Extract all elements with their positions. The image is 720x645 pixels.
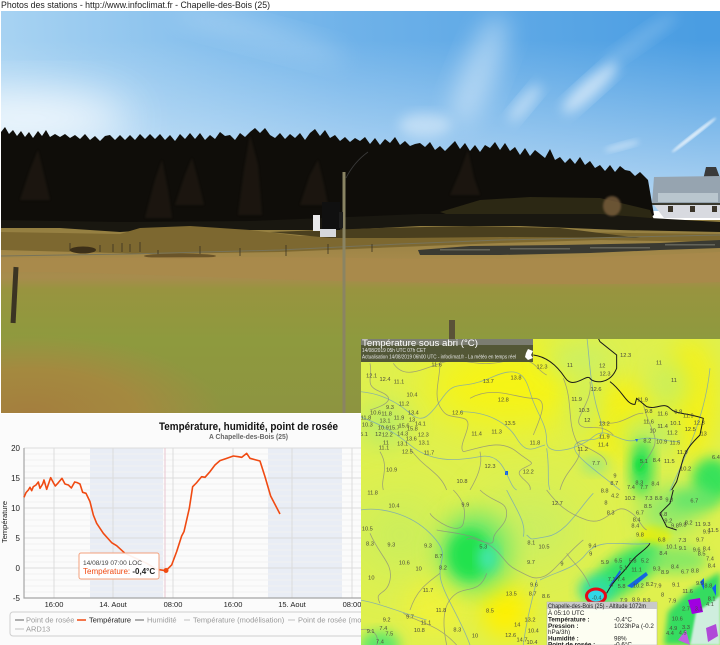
station labels, south: 7.3 <box>678 538 686 544</box>
station labels, north: 13.2 <box>599 422 610 428</box>
station labels, north: 12.3 <box>536 365 547 371</box>
station labels, north: 11 <box>656 361 662 367</box>
station labels, north: 12 <box>584 418 590 424</box>
station labels, north: 8.2 <box>643 439 651 445</box>
station labels, south: 9 <box>589 552 592 558</box>
station labels, south: 9.6 <box>530 582 538 588</box>
station labels, north: 12.5 <box>685 427 696 433</box>
station labels, north: 9 <box>613 473 617 479</box>
station labels, south: 8 <box>661 593 664 599</box>
station popup: 1023hPa (-0.2 <box>614 623 654 630</box>
station labels, south: 6.7 <box>636 510 644 516</box>
alpine cold corner <box>664 572 720 645</box>
station labels, north: 11.6 <box>643 419 654 425</box>
station labels, south: 8 <box>604 500 608 506</box>
station labels, south: 9.7 <box>527 560 535 566</box>
station labels, south: 7.4 <box>617 577 625 583</box>
station labels, south: 8.2 <box>646 582 654 588</box>
station popup: Pression : <box>548 623 578 630</box>
station labels, north: 10.3 <box>578 408 589 414</box>
station labels, south: 8.8 <box>655 496 663 502</box>
station labels, north: 15.8 <box>407 426 418 432</box>
station labels, north: 11 <box>567 363 573 369</box>
station labels, north: 13.1 <box>379 418 391 424</box>
station popup: Température : <box>548 616 590 624</box>
map header: Température sous abri (°C) <box>362 338 478 349</box>
temperature colour fields <box>355 340 720 645</box>
station labels, north: 11.8 <box>361 415 371 421</box>
legend: ARD13 <box>26 624 50 634</box>
legend <box>10 612 396 636</box>
station labels, south: 9.4 <box>588 543 596 549</box>
x axis labels: 16:00 <box>45 600 63 609</box>
station labels, south: 12.6 <box>505 633 516 639</box>
station labels, north: 11.2 <box>399 402 409 408</box>
station labels, south: 8.9 <box>632 597 640 603</box>
station labels, north: 9.8 <box>645 409 653 415</box>
station labels, north: 10.9 <box>656 440 667 446</box>
station labels, south: 5.9 <box>601 560 609 566</box>
station labels, south: 10.8 <box>414 628 425 634</box>
station labels, south: 11.8 <box>436 608 446 614</box>
station labels, south: 9.1 <box>367 629 375 635</box>
station labels, south: 10 <box>472 634 478 640</box>
station labels, south: 7.9 <box>654 584 662 590</box>
station labels, north: 12.2 <box>523 470 534 476</box>
station labels, south: 11.7 <box>423 588 433 594</box>
station labels, north: 11.7 <box>424 451 434 457</box>
station labels, south: 6.8 <box>658 538 666 544</box>
house <box>652 167 720 218</box>
station labels, south: 8.2 <box>685 520 693 526</box>
station labels, south: 5.1 <box>619 566 627 572</box>
station labels, south: 5.8 <box>618 584 626 590</box>
rivers <box>360 335 710 491</box>
station labels, south: -0.4 <box>592 596 602 602</box>
station popup: -0.4°C <box>614 616 632 624</box>
map base colour <box>361 339 720 645</box>
station labels, south: 9.9 <box>703 529 711 535</box>
station labels, south: 10.1 <box>666 544 677 550</box>
station labels, south: 5.8 <box>629 559 637 565</box>
station labels, north: 11.4 <box>598 442 609 448</box>
x axis labels: 16:00 <box>224 600 242 609</box>
y axis title: Température <box>0 501 9 543</box>
station labels, south: 3.1 <box>695 607 703 613</box>
station popup: 98% <box>614 636 627 642</box>
station labels, north: 13.1 <box>397 442 408 448</box>
station labels, south: 9.7 <box>696 537 704 543</box>
station labels, south: 4.4 <box>666 631 674 637</box>
station labels, south: 13.2 <box>524 617 535 623</box>
station labels, north: 10.6 <box>370 410 381 416</box>
station labels, north: 11.9 <box>599 434 610 440</box>
x axis labels: 14. Aout <box>99 600 128 609</box>
station labels, south: 5.3 <box>479 545 487 551</box>
station labels, south: 8.3 <box>366 541 374 547</box>
station labels, south: 7.4 <box>379 626 387 632</box>
map header: Actualisation 14/08/2019 06h00 UTC - infoclimat.fr - La météo en temps réel <box>362 354 516 360</box>
station labels, north: 15.6 <box>398 423 410 429</box>
legend: Température <box>89 616 131 624</box>
station labels, north: 12.3 <box>484 464 495 470</box>
station labels, south: 7.5 <box>385 631 393 637</box>
station labels, south: 11.1 <box>421 621 431 627</box>
station labels, north: 11.5 <box>670 441 680 447</box>
night bands <box>90 448 342 598</box>
station labels, north: 14.1 <box>415 421 426 427</box>
y axis labels: 5 <box>16 534 21 543</box>
y axis labels: 15 <box>11 474 21 483</box>
station labels, north: 12.3 <box>694 420 705 426</box>
station labels, north: 11.4 <box>471 432 482 438</box>
station labels, south: 9.8 <box>636 533 644 539</box>
station labels, south: 8.8 <box>601 489 609 495</box>
station labels, south: 6.7 <box>681 569 689 575</box>
station labels, north: 9.3 <box>386 405 394 411</box>
station labels, north: 12 <box>599 363 605 369</box>
station labels, south: 4.5 <box>679 631 687 637</box>
station labels, south: 11.8 <box>367 490 378 496</box>
department borders <box>370 360 655 490</box>
red location marker <box>586 589 606 603</box>
station labels, north: 10.9 <box>386 467 397 473</box>
station labels, south: 8.7 <box>435 554 443 560</box>
station labels, south: 9.6 <box>693 547 701 553</box>
station labels, south: 10.6 <box>399 561 410 567</box>
station labels, south: 4.1 <box>706 602 714 608</box>
station popup: Chapelle-des-Bois (25) - Altitude 1072m <box>548 604 646 610</box>
legend: Point de rosée <box>26 616 74 624</box>
tooltip: Température: -0,4°C <box>83 567 155 576</box>
station labels, south: 8.6 <box>542 594 550 600</box>
station labels, north: 11.6 <box>657 411 668 417</box>
station labels, south: 11.1 <box>631 568 642 574</box>
station labels, south: 10.2 <box>624 496 635 502</box>
map header <box>361 338 533 362</box>
x axis labels: 15. Aout <box>278 600 307 609</box>
station labels, south: 10 <box>368 575 374 581</box>
station labels, south: 9.8 <box>671 524 679 530</box>
station labels, north: 11.2 <box>667 431 678 437</box>
station labels, south: 2.7 <box>682 607 690 613</box>
station labels, north: 11.9 <box>683 414 694 420</box>
station labels, south: 9 <box>560 561 564 567</box>
station labels, north: 10.1 <box>670 421 681 427</box>
chart subtitle: A Chapelle-des-Bois (25) <box>209 432 288 441</box>
station labels, south: 8.3 <box>453 628 461 634</box>
y axis labels: 20 <box>11 444 21 453</box>
sky <box>1 11 720 211</box>
tooltip <box>79 553 159 579</box>
station popup: À 05:10 UTC <box>548 608 585 617</box>
station labels, north: 10.4 <box>406 392 418 398</box>
map header: 14/08/2019 05h UTC 07h CET <box>362 348 426 354</box>
station labels, north: 12.3 <box>418 433 429 439</box>
station labels, north: 11.9 <box>637 397 648 403</box>
station labels, north: 8.7 <box>610 481 618 487</box>
station labels, south: 8.4 <box>633 517 641 523</box>
y axis labels <box>11 444 21 603</box>
station labels, north <box>360 353 720 491</box>
weather station pole <box>313 152 368 413</box>
station labels, south: 8.5 <box>644 504 652 510</box>
station labels, north: 12.6 <box>590 387 601 393</box>
station labels, south: 8.5 <box>486 609 494 615</box>
station labels, south: 9.9 <box>461 503 469 509</box>
station labels, north: 11.9 <box>571 397 582 403</box>
station labels, north: 8.4 <box>651 482 659 488</box>
station labels, south: 9.2 <box>664 518 672 524</box>
station labels, south: 9.2 <box>383 617 391 623</box>
fence posts <box>11 267 19 323</box>
station labels, north: 8.8 <box>674 409 682 415</box>
station labels, north: 11 <box>383 440 389 446</box>
lakes <box>505 439 648 588</box>
station labels, south: 14 <box>514 622 520 628</box>
station labels, north: 11.8 <box>530 441 540 447</box>
x axis labels: 08:00 <box>164 600 182 609</box>
station labels, north: 12.2 <box>382 432 393 438</box>
station labels, south: 8.9 <box>643 598 651 604</box>
station labels, north: 12 <box>375 432 381 438</box>
x axis labels <box>45 600 361 609</box>
tooltip: 14/08/19 07:00 LOC <box>83 560 142 567</box>
station labels, south: 14.7 <box>516 637 527 643</box>
station labels, north: 7.4 <box>627 485 635 491</box>
stone wall <box>418 240 720 255</box>
bare tree <box>603 196 621 216</box>
station labels, north: 13.8 <box>510 375 521 381</box>
station labels, north: 5.1 <box>360 432 368 438</box>
station labels, south: 3.3 <box>682 625 690 631</box>
road and fence <box>1 235 720 256</box>
station labels, south: 9.7 <box>406 614 414 620</box>
station labels, south: 8.3 <box>607 511 615 517</box>
station labels, north: 7.7 <box>640 485 648 491</box>
station labels, north: 14.3 <box>397 431 408 437</box>
station labels, north: 13.1 <box>418 441 430 447</box>
station labels, south: 9.3 <box>424 543 432 549</box>
legend: Température (modélisation) <box>193 616 285 624</box>
station labels, south: 8.8 <box>704 584 712 590</box>
station labels, south: 8.8 <box>659 512 667 518</box>
meadow texture <box>150 257 607 284</box>
station labels, south: 8.1 <box>527 540 535 546</box>
panel: temperature chart <box>0 414 396 645</box>
station labels, north: 13 <box>700 431 707 437</box>
station labels, north: 11.1 <box>394 379 404 385</box>
station labels, south: 11.5 <box>708 528 719 534</box>
station labels, north: 10.8 <box>456 479 467 485</box>
icon: France <box>525 349 533 360</box>
station labels, south: 8.7 <box>529 592 537 598</box>
station labels, south: 7.1 <box>608 577 616 583</box>
station labels, north: 10 <box>649 429 656 435</box>
station labels, south: 10.6 <box>672 617 683 623</box>
station labels, south: 4.9 <box>669 626 677 632</box>
station labels, north: 11.9 <box>677 450 688 456</box>
station labels, north: 13.7 <box>483 379 494 385</box>
station labels, south: 10.2 <box>633 584 644 590</box>
station labels, north: 11.6 <box>431 363 442 369</box>
station labels, north: 12.3 <box>599 371 610 377</box>
axes <box>24 448 361 598</box>
panel: temperature map <box>355 335 720 645</box>
station labels, north: 5.1 <box>640 459 648 465</box>
station popup: hPa/3h) <box>548 629 570 636</box>
station labels, south: 10.4 <box>388 504 400 510</box>
station labels, north: 7.7 <box>592 461 600 467</box>
station labels, north: 12.1 <box>366 374 377 380</box>
station labels, south: 10 <box>416 567 422 573</box>
forest <box>1 127 654 226</box>
forest sunlit tree tones <box>20 135 480 218</box>
national border <box>533 335 703 490</box>
station labels, south: 7.9 <box>668 598 676 604</box>
station labels, north: 13.5 <box>504 421 515 427</box>
grid <box>24 454 361 592</box>
station labels, north: 11.8 <box>381 412 392 418</box>
station labels, north: 13.6 <box>406 436 417 442</box>
station labels, north: 15.7 <box>389 426 400 432</box>
station labels, south: 8.4 <box>671 565 679 571</box>
station labels, north: 11.2 <box>577 447 588 453</box>
station labels, south: 8.4 <box>631 524 639 530</box>
station labels, north: 8.3 <box>635 480 643 486</box>
station labels, south: 11 <box>695 522 701 528</box>
station labels, south: 7.4 <box>706 557 714 563</box>
station labels, south: 9.3 <box>665 498 673 504</box>
station labels, south: 10.5 <box>362 527 373 533</box>
station labels, north: 11.1 <box>379 446 389 452</box>
station labels, north: 12.5 <box>402 450 413 456</box>
station labels, south: 11.6 <box>682 589 693 595</box>
station labels, south: 9.3 <box>387 543 395 549</box>
station labels, north: 12.3 <box>620 353 631 359</box>
highlighted point <box>164 568 168 573</box>
station labels, south: 10.4 <box>528 629 539 635</box>
station labels, south: 7.3 <box>645 496 653 502</box>
station labels, north: 13 <box>409 418 415 424</box>
station labels, north: 12.6 <box>452 411 463 417</box>
station labels, south: 9.9 <box>696 581 704 587</box>
legend: Point de rosée (modélisation) <box>298 616 396 624</box>
station labels, north: 11.4 <box>657 424 668 430</box>
station labels, south: 5.2 <box>641 559 649 565</box>
panel: station photo <box>0 0 720 413</box>
station labels, south: 9.3 <box>653 566 661 572</box>
station labels, north: 11.9 <box>394 416 404 422</box>
station labels, north: 12.4 <box>379 377 391 383</box>
station labels, south: 12.7 <box>552 501 563 507</box>
chart title: Température, humidité, point de rosée <box>159 421 338 433</box>
y axis labels: -5 <box>13 594 21 603</box>
station labels, south: 8.2 <box>439 565 447 571</box>
station labels, south: 6.5 <box>614 559 622 565</box>
station labels, south: 4.2 <box>611 494 619 500</box>
station popup <box>547 602 657 645</box>
field <box>1 220 720 413</box>
station labels, south: 8.8 <box>691 568 699 574</box>
station labels, south: 9.1 <box>679 546 687 552</box>
station labels, north: 12.8 <box>498 398 509 404</box>
station labels, south: 4 <box>610 583 613 589</box>
station labels, south: 6.7 <box>690 499 698 505</box>
distant meadow and hedge <box>440 197 654 218</box>
station labels, north: 10.2 <box>680 467 691 473</box>
station labels, south: 7.9 <box>620 598 628 604</box>
station labels, south: 8.4 <box>703 546 711 552</box>
station labels, south: 10.5 <box>538 544 549 550</box>
station labels, north: 8.4 <box>653 458 661 464</box>
station labels, north: 11.5 <box>664 459 675 465</box>
station labels, north: 13.4 <box>408 410 419 416</box>
station labels, north: 6.4 <box>712 455 720 461</box>
x axis labels: 08:00 <box>343 600 361 609</box>
station labels, south: 13.5 <box>506 591 517 597</box>
station labels, south: 8.5 <box>698 552 706 558</box>
page heading: Photos des stations - http://www.infoclimat.fr - Chapelle-des-Bois (25) <box>1 0 270 11</box>
dry grass foreground <box>1 347 193 413</box>
station labels, south: 9.1 <box>672 583 680 589</box>
temperature curve <box>24 453 280 571</box>
legend: Humidité <box>147 616 177 624</box>
station labels, south: 9.3 <box>703 522 711 528</box>
station labels, south: 8.4 <box>659 551 667 557</box>
station labels, north: 10.9 <box>378 426 389 432</box>
y axis labels: 0 <box>16 564 21 573</box>
y axis labels: 10 <box>11 504 21 513</box>
station labels, north: 11 <box>671 378 677 384</box>
station labels, south: 8.9 <box>661 570 669 576</box>
station labels, south: 9.8 <box>679 523 687 529</box>
station labels, north: 11.3 <box>491 430 502 436</box>
station popup: Humidité : <box>548 636 579 642</box>
station labels, south <box>362 489 719 645</box>
clouds <box>0 0 717 154</box>
station labels, south: 8.1 <box>708 597 716 603</box>
station labels, south: 8.4 <box>708 564 716 570</box>
station labels, north: 10.3 <box>362 423 373 429</box>
